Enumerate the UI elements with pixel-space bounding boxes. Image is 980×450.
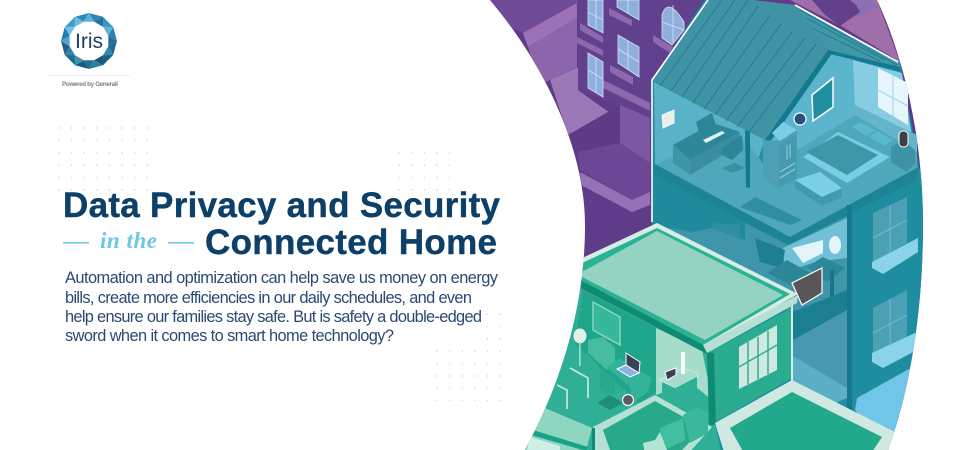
green house back wall [575, 290, 656, 403]
icon: sensor [622, 394, 634, 406]
house outline [652, 0, 898, 222]
drawers [588, 337, 615, 370]
top floor [655, 115, 917, 237]
dot grid: upper left [53, 122, 153, 197]
intro paragraph: bills, create more efficiencies in our daily schedules, and even [65, 289, 472, 307]
in the tagline: in the [100, 228, 157, 253]
in the tagline [63, 228, 194, 253]
green house right wall [707, 308, 792, 422]
green house [520, 223, 897, 450]
intro paragraph [65, 269, 499, 345]
wardrobe [763, 122, 797, 188]
lower middle roof [592, 395, 712, 450]
wall picture [593, 302, 620, 345]
title line 1: Data Privacy and Security [63, 186, 501, 225]
logo: Iris [48, 13, 130, 88]
column strip [847, 205, 852, 415]
lower right roof [715, 380, 897, 450]
icon: wall display [662, 110, 674, 128]
icon: laptop [617, 353, 640, 377]
side table [660, 368, 698, 402]
sky panel [855, 368, 910, 450]
floor slab [653, 163, 917, 245]
intro paragraph: sword when it comes to smart home technology? [65, 327, 394, 345]
teal house structure [652, 0, 930, 450]
intro paragraph: help ensure our families stay safe. But is safety a double-edged [65, 308, 482, 326]
rug [740, 197, 802, 225]
lower left roof [520, 408, 592, 450]
green house floor [520, 285, 722, 450]
floor lamp [574, 328, 586, 366]
office desk [673, 113, 745, 175]
icon: tablet [665, 368, 676, 380]
icon: television [792, 268, 822, 305]
upper balcony [872, 238, 918, 274]
lower floor room [653, 175, 847, 310]
nightstand [891, 140, 915, 172]
logo: Iris: Iris [75, 30, 103, 53]
desk [607, 358, 652, 403]
dot grid: centre [388, 146, 450, 196]
top floor walls [654, 51, 917, 164]
green roof [580, 223, 798, 354]
icon: thermostat [794, 113, 806, 125]
dark corner column [707, 352, 716, 425]
pale room wall [656, 328, 708, 397]
roof [652, 0, 900, 142]
intro paragraph: Automation and optimization can help save us money on energy [65, 269, 499, 287]
media shelf [793, 290, 847, 340]
title line 2: Connected Home [205, 223, 497, 262]
picture frame [812, 78, 833, 121]
lower balcony [872, 332, 917, 368]
dot grid: lower right [431, 345, 505, 401]
ottoman [795, 172, 842, 206]
illustration: isometric connected homes [480, 0, 930, 450]
green window [739, 325, 777, 389]
bedroom window [878, 68, 908, 125]
partition [745, 130, 750, 188]
smart light [681, 352, 685, 374]
chair [597, 370, 623, 410]
lower apartment window [873, 290, 907, 355]
bottom room [793, 310, 847, 404]
bed [803, 122, 893, 183]
dot grid: beside text [481, 304, 505, 345]
left table [557, 368, 588, 409]
logo: Iris: Powered by Generali [62, 81, 118, 88]
purple neighbouring building [480, 0, 900, 212]
upper apartment window [873, 197, 907, 262]
icon: smart speaker [899, 131, 908, 147]
